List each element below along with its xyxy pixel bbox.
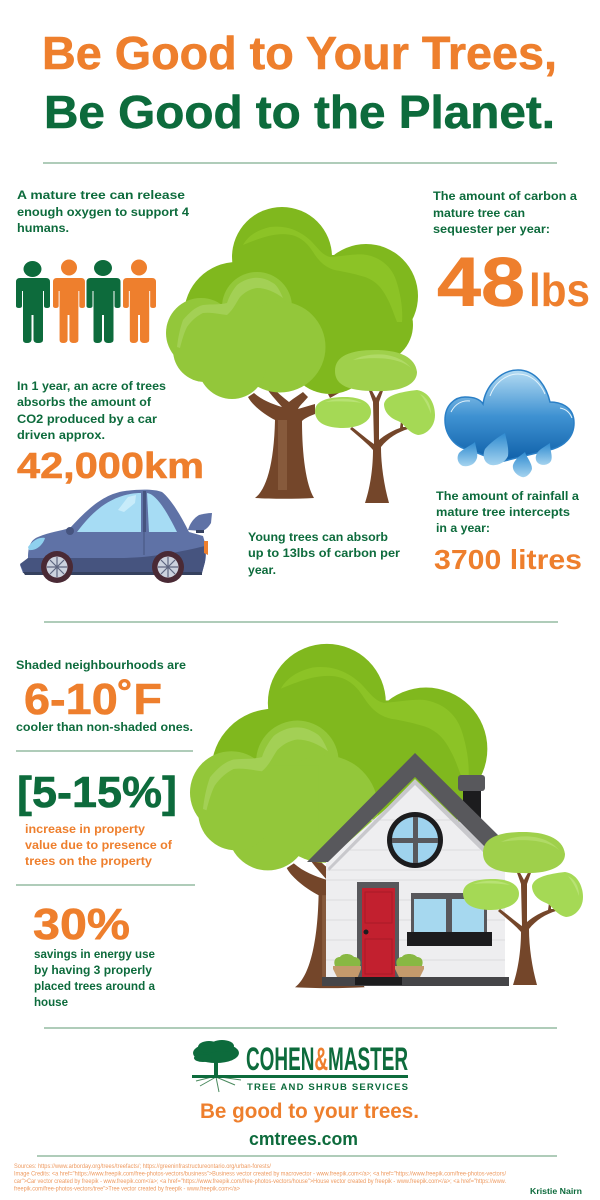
logo: Cohen and Master: COHEN&MASTER xyxy=(246,1041,408,1077)
title xyxy=(42,27,557,138)
stat: 3700 litres: 3700 litres xyxy=(434,544,582,575)
text: energy savings xyxy=(34,949,156,1009)
website: cmtrees.com xyxy=(249,1129,358,1149)
stat: 42,000km: 42,000km xyxy=(17,445,204,486)
icon: car xyxy=(20,490,212,583)
illustration: large tree xyxy=(166,207,418,499)
text: property value xyxy=(25,824,172,868)
illustration: house xyxy=(307,753,509,986)
text: CO2 fact: absorbs the amount of xyxy=(17,397,151,409)
text: CO2 fact xyxy=(17,381,166,442)
tagline: Be good to your trees. xyxy=(200,1100,419,1123)
text: carbon fact: mature tree can xyxy=(433,208,525,220)
text: oxygen fact: A mature tree can release xyxy=(17,190,185,202)
stat: 48lbs: lbs xyxy=(529,264,590,316)
sources and credits: freepik.com/free-photos-vectors/tree">Tree vector created by freepik - www.freepik.com</a> xyxy=(14,1186,240,1192)
sources and credits xyxy=(14,1164,506,1192)
text: CO2 fact: CO2 produced by a car xyxy=(17,414,158,426)
text: property value: value due to presence of xyxy=(25,840,172,852)
sources and credits: Image Credits: <a href="https://www.freepik.com/free-photos-vectors/business">Business vector created by macrovector - www.freepik.com</a>; <a href="https://www.freepik.com/free-photos-vectors/ xyxy=(14,1172,506,1178)
text: cooler: cooler than non-shaded ones. xyxy=(16,722,193,734)
stat: 6-10 degrees F: 6-10˚F xyxy=(24,675,162,724)
text: oxygen fact: humans. xyxy=(17,223,69,235)
text: oxygen fact xyxy=(17,190,190,235)
text: young trees fact: year. xyxy=(248,565,276,577)
author credit: Kristie Nairn xyxy=(530,1186,582,1196)
icon: four people xyxy=(16,260,156,343)
text: energy savings: savings in energy use xyxy=(34,949,155,961)
text: young trees fact xyxy=(248,532,401,577)
text: rainfall fact xyxy=(436,491,580,535)
text: rainfall fact: The amount of rainfall a xyxy=(436,491,580,503)
text: rainfall fact: mature tree intercepts xyxy=(436,507,570,519)
text: CO2 fact: In 1 year, an acre of trees xyxy=(17,381,166,393)
stat: 30%: 30% xyxy=(33,900,130,949)
stat: 48lbs: 48 xyxy=(437,243,525,321)
logo: Cohen and Master xyxy=(192,1040,408,1093)
text: energy savings: placed trees around a xyxy=(34,981,156,993)
illustration: small tree beside house xyxy=(463,832,583,985)
text: rainfall fact: in a year: xyxy=(436,523,490,535)
text: oxygen fact: enough oxygen to support 4 xyxy=(17,207,190,219)
logo: Cohen and Master: TREE AND SHRUB SERVICES xyxy=(247,1082,408,1093)
illustration: tree behind house xyxy=(190,644,487,988)
text: young trees fact: Young trees can absorb xyxy=(248,532,388,544)
text: young trees fact: up to 13lbs of carbon per xyxy=(248,548,401,560)
icon: rain cloud xyxy=(445,370,574,477)
text: energy savings: house xyxy=(34,997,68,1009)
text: energy savings: by having 3 properly xyxy=(34,965,153,977)
text: shaded neighbourhoods: Shaded neighbourhoods are xyxy=(16,660,186,672)
illustration: small tree xyxy=(315,350,435,503)
title: Be Good to the Planet. xyxy=(44,86,555,138)
stat: 48lbs xyxy=(437,243,590,321)
text: carbon fact xyxy=(433,191,578,236)
text: property value: trees on the property xyxy=(25,856,153,868)
title: Be Good to Your Trees, xyxy=(42,27,557,79)
stat: 5-15%: [5-15%] xyxy=(17,768,177,817)
sources and credits: Sources: https://www.arborday.org/trees/treefacts/; https://greeninfrastructureontario.org/urban-forests/ xyxy=(14,1164,271,1170)
text: carbon fact: sequester per year: xyxy=(433,224,550,236)
sources and credits: car">Car vector created by freepik - www.freepik.com</a>; <a href="https://www.freepik.com/free-photos-vectors/house">House vector created by freepik - www.freepik.com</a>; <a href="https://www. xyxy=(14,1179,506,1185)
text: carbon fact: The amount of carbon a xyxy=(433,191,578,203)
text: property value: increase in property xyxy=(25,824,146,836)
logo tree icon xyxy=(193,1040,241,1092)
text: CO2 fact: driven approx. xyxy=(17,430,105,442)
